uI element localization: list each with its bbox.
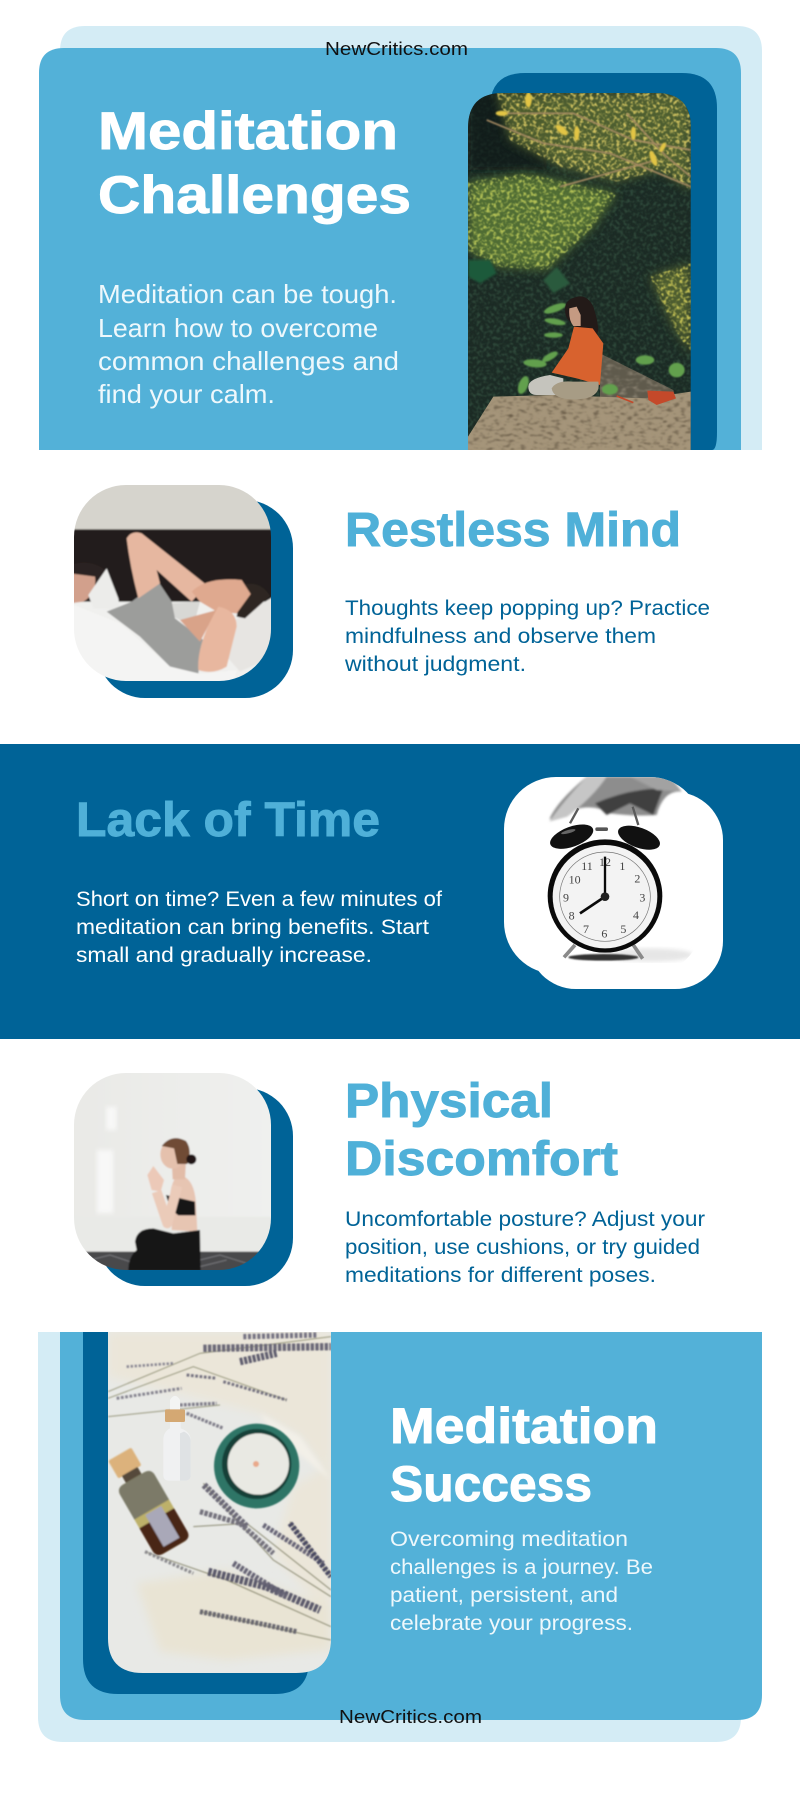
intro paragraph: Meditation can be tough. <box>98 279 397 309</box>
clock handle <box>570 807 638 825</box>
main blue panel <box>60 1332 762 1720</box>
face and hands <box>192 579 251 613</box>
dark photo backing <box>97 1088 293 1286</box>
body text <box>390 1527 653 1635</box>
right pillow <box>229 596 271 670</box>
title: Meditation Challenges: Challenges <box>98 166 411 225</box>
body text: challenges is a journey. Be <box>390 1555 653 1579</box>
dark photo backing <box>97 500 293 698</box>
shirt <box>107 582 203 673</box>
intro paragraph <box>98 279 399 409</box>
duvet <box>70 603 237 683</box>
heading: Lack of Time <box>76 794 380 847</box>
panel: Meditation Success <box>38 1332 762 1742</box>
photo: alarm clock with hand on top: 6 <box>601 926 607 940</box>
body text: mindfulness and observe them <box>345 625 656 648</box>
light backing panel <box>38 1332 741 1742</box>
photo: alarm clock with hand on top: 12 <box>599 855 611 869</box>
body text: without judgment. <box>344 653 526 676</box>
dark band <box>0 744 800 1039</box>
body text: position, use cushions, or try guided <box>345 1236 700 1259</box>
body text: celebrate your progress. <box>390 1611 633 1635</box>
title: Meditation Challenges <box>98 102 411 225</box>
photo: alarm clock with hand on top <box>504 777 702 974</box>
photo: woman in prayer pose <box>70 1070 273 1273</box>
watermark bottom: NewCritics.com <box>339 1706 482 1727</box>
candle <box>214 1424 299 1508</box>
legs <box>128 1228 201 1271</box>
arm <box>157 1186 177 1223</box>
photo: alarm clock with hand on top: 9 <box>563 891 569 905</box>
intro paragraph: Learn how to overcome <box>98 313 378 343</box>
person <box>565 296 598 335</box>
rocks <box>600 354 674 398</box>
photo: woman meditating on a rock in a forest <box>468 93 691 450</box>
photo: alarm clock with hand on top: 3 <box>639 891 645 905</box>
red book <box>647 391 676 405</box>
photo: alarm clock with hand on top: 4 <box>633 908 639 922</box>
feet <box>564 945 575 957</box>
white photo backing <box>528 792 723 989</box>
section: Restless Mind <box>70 482 710 698</box>
bells <box>550 824 594 849</box>
left foliage <box>468 173 617 270</box>
watermark top: NewCritics.com <box>325 38 468 59</box>
lavender top <box>108 1335 331 1428</box>
body text: meditations for different poses. <box>345 1264 656 1287</box>
body text <box>344 597 710 676</box>
section: Physical Discomfort <box>70 1070 705 1287</box>
body and face <box>548 839 662 953</box>
photo: candle, oil bottles and lavender <box>102 1332 331 1673</box>
photo: alarm clock with hand on top: 11 <box>581 859 593 873</box>
neck and head <box>172 1160 186 1179</box>
heading: Restless Mind <box>345 504 681 557</box>
body text: Short on time? Even a few minutes of <box>76 888 442 911</box>
light backing panel <box>60 26 762 450</box>
hands of clock <box>604 856 606 893</box>
body text: small and gradually increase. <box>76 944 372 967</box>
photo: alarm clock with hand on top: 2 <box>634 871 640 885</box>
heading: Physical <box>345 1075 553 1128</box>
canopy <box>497 93 691 190</box>
body text <box>345 1208 705 1287</box>
man left <box>84 574 86 575</box>
main blue panel <box>39 48 741 450</box>
lavender bottom <box>145 1483 331 1640</box>
body text: patient, persistent, and <box>390 1583 618 1607</box>
photo: alarm clock with hand on top: 5 <box>620 922 626 936</box>
amber bottle <box>108 1447 190 1556</box>
title: Meditation Challenges: Meditation <box>98 102 398 161</box>
photo: alarm clock with hand on top: 7 <box>583 922 589 936</box>
dark photo backing <box>490 73 717 450</box>
body text: Thoughts keep popping up? Practice <box>345 597 710 620</box>
dark photo backing <box>83 1332 309 1694</box>
body text: meditation can bring benefits. Start <box>76 916 429 939</box>
heading <box>345 1075 618 1186</box>
intro paragraph: common challenges and <box>98 346 399 376</box>
section: Lack of Time <box>0 744 800 1039</box>
heading: Meditation <box>390 1398 658 1454</box>
panel: intro header <box>39 26 762 450</box>
hand <box>549 777 682 822</box>
right foliage <box>650 263 691 353</box>
body text: Uncomfortable posture? Adjust your <box>345 1208 705 1231</box>
heading <box>390 1398 658 1512</box>
body text: Overcoming meditation <box>390 1527 628 1551</box>
white dropper bottle <box>170 1396 180 1410</box>
intro paragraph: find your calm. <box>98 379 275 409</box>
photo: alarm clock with hand on top: 10 <box>569 872 581 886</box>
photo: alarm clock with hand on top: 1 <box>619 859 625 873</box>
photo: alarm clock with hand on top: 8 <box>569 909 575 923</box>
shadow <box>607 948 693 962</box>
body text <box>76 888 442 967</box>
photo: woman in bed covering her face <box>70 482 273 683</box>
heading: Discomfort <box>345 1133 618 1186</box>
arm raised <box>127 532 207 602</box>
hair right <box>237 584 270 618</box>
yellow leaves <box>496 93 667 167</box>
heading: Success <box>390 1456 592 1512</box>
plants <box>516 301 685 395</box>
body <box>170 1175 197 1232</box>
